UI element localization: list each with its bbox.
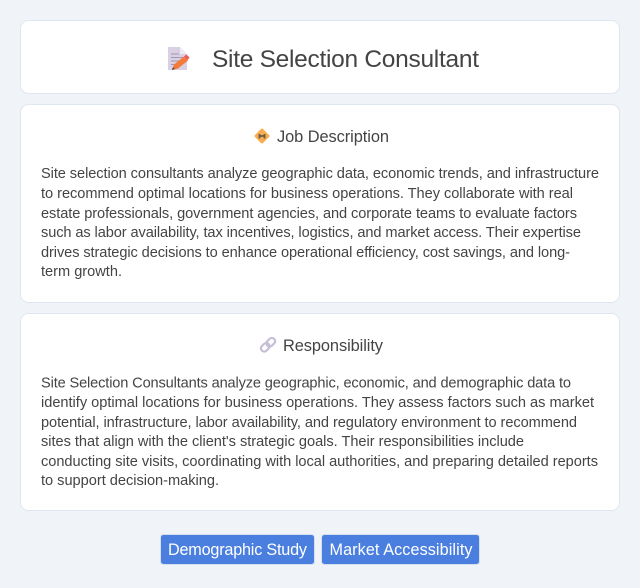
- text block: responsibility: conducting site visits, coordinating with local authorities, and preparing detailed reports: [41, 454, 598, 470]
- title: Site Selection Consultant: [212, 46, 479, 73]
- text block: job description: to recommend optimal locations for business operations. They collaborate with real: [41, 186, 573, 202]
- text block: responsibility: potential, infrastructure, labor availability, and regulatory environment to recommend: [41, 415, 577, 431]
- text block: responsibility: identify optimal locations for business operations. They assess factors such as market: [41, 395, 594, 411]
- text block: job description: drives strategic decisions to enhance operational efficiency, cost savings, and long-: [41, 245, 570, 261]
- text block: responsibility: to support decision-making.: [41, 473, 219, 489]
- icon: document with pencil: [168, 47, 190, 70]
- text block: responsibility: Site Selection Consultants analyze geographic, economic, and demographic data to: [41, 376, 571, 392]
- tag: market accessibility: Market Accessibility: [330, 541, 473, 559]
- heading: job description: Job Description: [277, 128, 389, 146]
- tag: demographic study: [160, 534, 314, 564]
- panel: job description: [20, 104, 620, 302]
- text block: job description: Site selection consultants analyze geographic data, economic trends, and infrastructure: [41, 166, 599, 182]
- text block: responsibility: sites that align with the client's strategic goals. Their responsibilities include: [41, 434, 524, 450]
- text block: job description: term growth.: [41, 264, 122, 280]
- text block: responsibility: [41, 376, 598, 489]
- text block: job description: [41, 166, 599, 280]
- panel: responsibility: [20, 314, 620, 510]
- icon: chain link: [260, 337, 276, 353]
- tag: market accessibility: [322, 534, 480, 564]
- panel: title header: [20, 20, 620, 94]
- text block: job description: estate professionals, government agencies, and corporate teams to evaluate factors: [41, 206, 577, 222]
- icon: orange diamond sign: [254, 128, 270, 144]
- tag: demographic study: Demographic Study: [168, 541, 308, 559]
- heading: responsibility: Responsibility: [283, 337, 384, 355]
- text block: job description: such as labor availability, tax incentives, logistics, and market access. Their expertise: [41, 225, 581, 241]
